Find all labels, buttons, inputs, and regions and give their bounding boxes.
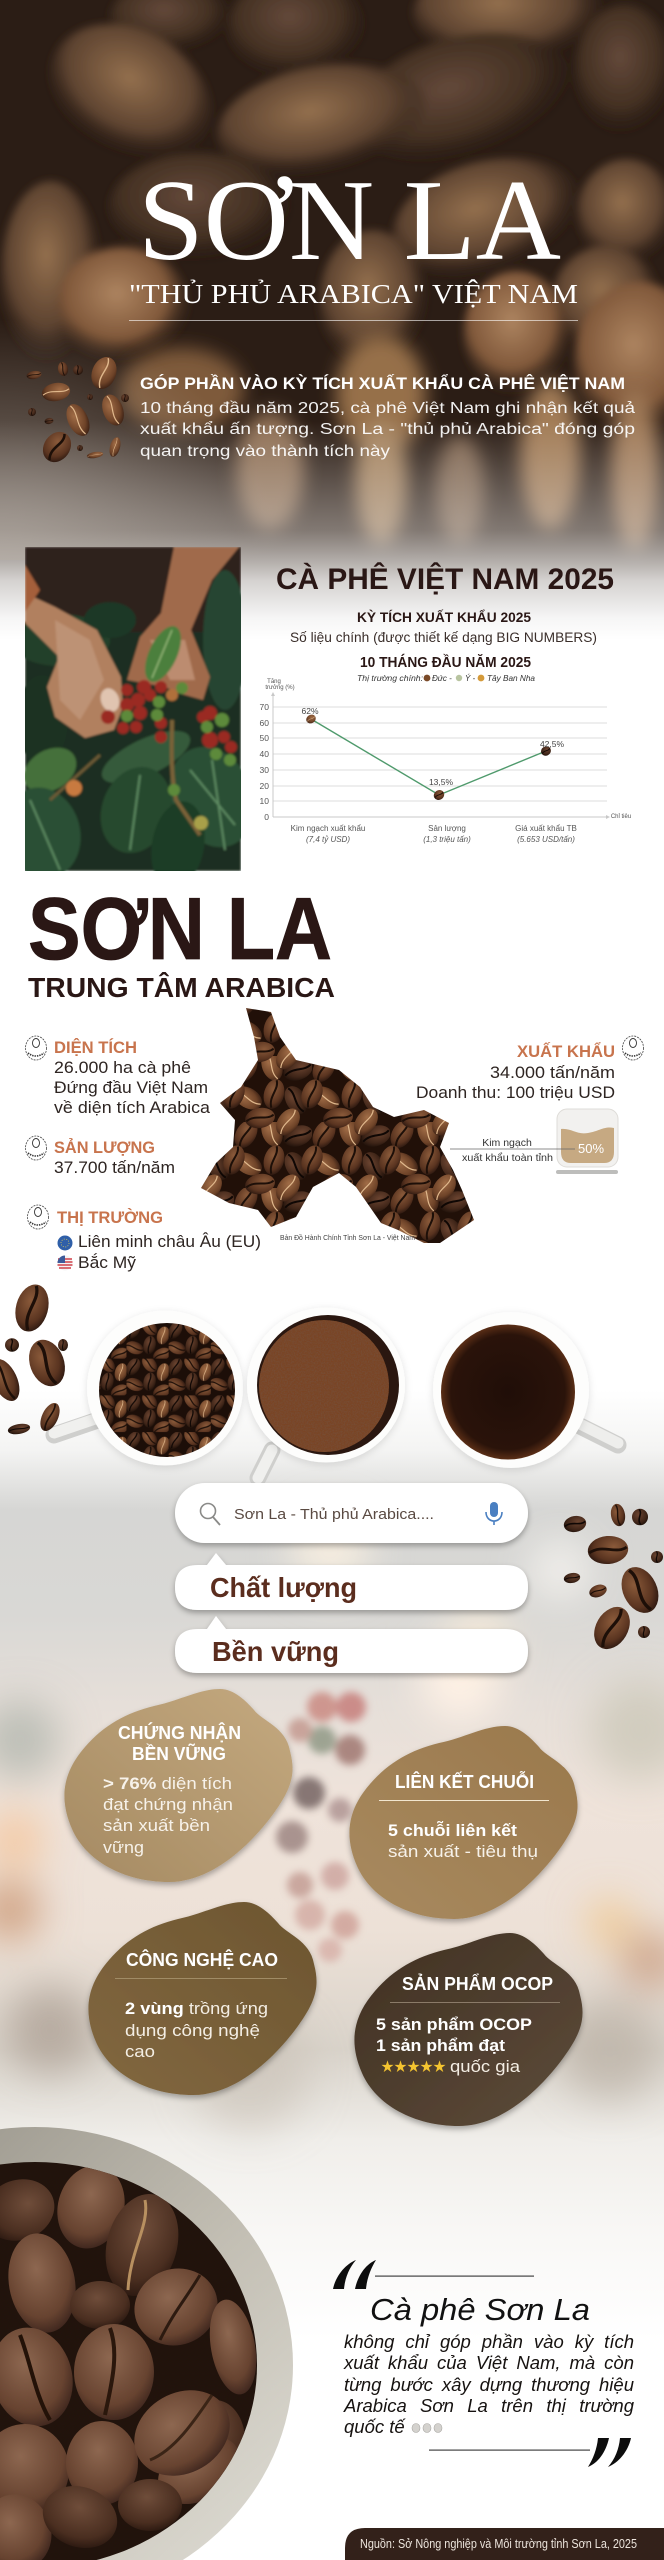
panel: OCOP products (354, 1933, 583, 2126)
icon: flying beans left (0, 1281, 71, 1436)
intro text: quan trọng vào thành tích này (140, 443, 390, 460)
panel: OCOP products: 5 sản phẩm OCOP (376, 2016, 532, 2034)
quote heading: Cà phê Sơn La (370, 2292, 590, 2327)
map caption: Bản Đồ Hành Chính Tỉnh Sơn La - Việt Nam (280, 1233, 415, 1242)
panel: value chain links: LIÊN KẾT CHUỖI (395, 1771, 534, 1792)
stat: xuất khẩu: 34.000 tấn/năm (490, 1064, 615, 1082)
line chart: 30 (260, 765, 269, 775)
chart heading: Kỳ tích xuất khẩu 2025: KỲ TÍCH XUẤT KHẨU 2025 (357, 610, 532, 625)
stat: thị trường: Bắc Mỹ (78, 1253, 137, 1272)
intro text (140, 400, 635, 460)
stat: thị trường: Liên minh châu Âu (EU) (78, 1232, 261, 1251)
panel: OCOP products: 1 sản phẩm đạt (376, 2037, 506, 2055)
stat: diện tích: Đứng đầu Việt Nam (54, 1079, 208, 1097)
panel: value chain links: sản xuất - tiêu thụ (388, 1843, 538, 1861)
line chart: 62% (301, 706, 319, 716)
line chart: 50 (260, 733, 269, 743)
cup: coffee beans (54, 1310, 243, 1466)
panel: OCOP products: ★★★★★ (381, 2059, 446, 2074)
closing quote mark (588, 2438, 631, 2467)
panel: sustainable certification (64, 1689, 293, 1882)
stat: diện tích: 26.000 ha cà phê (54, 1059, 191, 1077)
map of Son La made of coffee beans (201, 1008, 474, 1243)
line chart: Kim ngạch xuất khẩu (291, 824, 365, 833)
icon: three small beans (412, 2424, 442, 2432)
quote body text: không chỉ góp phần vào kỳ tích (344, 2331, 634, 2352)
photo: hands picking coffee cherries (25, 547, 241, 871)
subtitle: "THỦ PHỦ ARABICA" VIỆT NAM (129, 279, 578, 309)
line chart: 20 (260, 781, 269, 791)
quote body text (343, 2331, 634, 2437)
chart subtitle: Số liệu chính (được thiết kế dạng BIG NUMBERS) (290, 630, 597, 645)
opening quote mark (333, 2260, 376, 2289)
panel: sustainable certification: đạt chứng nhận (103, 1796, 233, 1814)
stat: diện tích: DIỆN TÍCH (54, 1038, 137, 1057)
line chart: (1,3 triệu tấn) (423, 835, 471, 844)
icon: scattered coffee beans (26, 353, 129, 468)
panel: high technology: dụng công nghệ (125, 2022, 260, 2040)
line chart: Giá xuất khẩu TB (515, 824, 577, 833)
cup gauge: 50% export value: Kim ngạch (482, 1137, 532, 1149)
line chart: 10 (260, 796, 269, 806)
search suggestion: bền vững (175, 1616, 528, 1673)
line chart: Tăng (267, 679, 281, 685)
line chart: (5.653 USD/tấn) (517, 835, 575, 844)
cup: ground coffee (247, 1308, 405, 1478)
line chart (260, 679, 631, 844)
panel: value chain links: 5 chuỗi liên kết (388, 1821, 518, 1840)
search suggestion: bền vững: Bền vững (212, 1636, 339, 1667)
quote body text: xuất khẩu của Việt Nam, mà còn (344, 2352, 634, 2373)
panel: sustainable certification: sản xuất bền (103, 1817, 210, 1835)
hero photo: blurred coffee beans (0, 0, 664, 640)
panel: sustainable certification: BỀN VỮNG (132, 1743, 226, 1764)
subheading: Trung tâm Arabica: TRUNG TÂM ARABICA (28, 972, 335, 1003)
panel: value chain links (349, 1726, 578, 1919)
panel: high technology: 2 vùng trồng ứng (125, 2000, 268, 2018)
main markets note: Ý - (465, 674, 476, 683)
title: Sơn La: SƠN LA (138, 157, 561, 284)
quote body text: từng bước xây dựng thương hiệu (344, 2374, 634, 2395)
line chart: Sản lượng (428, 824, 466, 833)
icon: flying beans right (563, 1503, 664, 1655)
stat: xuất khẩu: XUẤT KHẨU (517, 1042, 615, 1061)
panel: high technology: cao (125, 2043, 155, 2061)
stat: diện tích: về diện tích Arabica (54, 1099, 211, 1117)
main markets note (357, 674, 536, 683)
stat: thị trường (28, 1205, 261, 1272)
panel: OCOP products: SẢN PHẨM OCOP (402, 1973, 553, 1994)
main markets note: Đức - (432, 674, 452, 683)
cup gauge: 50% export value (450, 1109, 618, 1174)
quote body text: quốc tế (344, 2416, 405, 2437)
chart period: 10 THÁNG ĐẦU NĂM 2025 (360, 654, 531, 671)
cup gauge: 50% export value: xuất khẩu toàn tỉnh (462, 1152, 553, 1164)
intro heading: GÓP PHẦN VÀO KỲ TÍCH XUẤT KHẨU CÀ PHÊ VIỆT NAM (140, 374, 625, 393)
intro text: xuất khẩu ấn tượng. Sơn La - "thủ phủ Arabica" đóng góp (140, 420, 635, 438)
stat: sản lượng: 37.700 tấn/năm (54, 1159, 175, 1177)
line chart: 70 (260, 702, 269, 712)
stat: thị trường: THỊ TRƯỜNG (57, 1208, 163, 1227)
panel: sustainable certification: > 76% diện tích (103, 1775, 232, 1793)
panel: high technology: CÔNG NGHỆ CAO (126, 1949, 278, 1970)
line chart: 13,5% (429, 777, 453, 787)
panel: sustainable certification: vững (103, 1839, 144, 1857)
line chart: 0 (264, 812, 269, 822)
bowl of coffee beans (0, 2127, 293, 2560)
stat: xuất khẩu: Doanh thu: 100 triệu USD (416, 1084, 615, 1102)
line chart: Chỉ tiêu (611, 813, 631, 820)
lower background: blurred coffee branch (0, 1390, 664, 2340)
main markets note: Thị trường chính: (357, 674, 423, 683)
line chart: 60 (260, 718, 269, 728)
line chart: 42,5% (540, 739, 564, 749)
heading: Cà phê Việt Nam 2025: CÀ PHÊ VIỆT NAM 2025 (276, 562, 614, 596)
cup: black coffee (433, 1312, 618, 1468)
stat: diện tích (26, 1036, 211, 1117)
line chart: (7,4 tỷ USD) (306, 835, 350, 844)
stat: sản lượng (26, 1136, 175, 1177)
line chart: 40 (260, 749, 269, 759)
heading: Sơn La: SƠN LA (28, 879, 332, 978)
panel: sustainable certification: CHỨNG NHẬN (118, 1722, 241, 1743)
stat: sản lượng: SẢN LƯỢNG (54, 1138, 155, 1157)
search suggestion: chất lượng: Chất lượng (210, 1572, 357, 1603)
quote body text: Arabica Sơn La trên thị trường (344, 2395, 634, 2416)
search bar: Sơn La - Thủ phủ Arabica.... (234, 1506, 434, 1523)
intro text: 10 tháng đầu năm 2025, cà phê Việt Nam ghi nhận kết quả (140, 400, 635, 417)
stat: xuất khẩu (416, 1036, 644, 1102)
cup gauge: 50% export value: 50% (578, 1141, 604, 1156)
search bar (175, 1483, 528, 1543)
hero lower-left mist (0, 320, 280, 560)
hero fade to white (0, 420, 664, 640)
search suggestion: chất lượng (175, 1553, 528, 1610)
line chart: trưởng (%) (265, 684, 295, 691)
panel: high technology (88, 1902, 317, 2095)
panel: OCOP products: quốc gia (450, 2058, 521, 2076)
main markets note: Tây Ban Nha (487, 674, 536, 683)
source footer (345, 2528, 664, 2560)
